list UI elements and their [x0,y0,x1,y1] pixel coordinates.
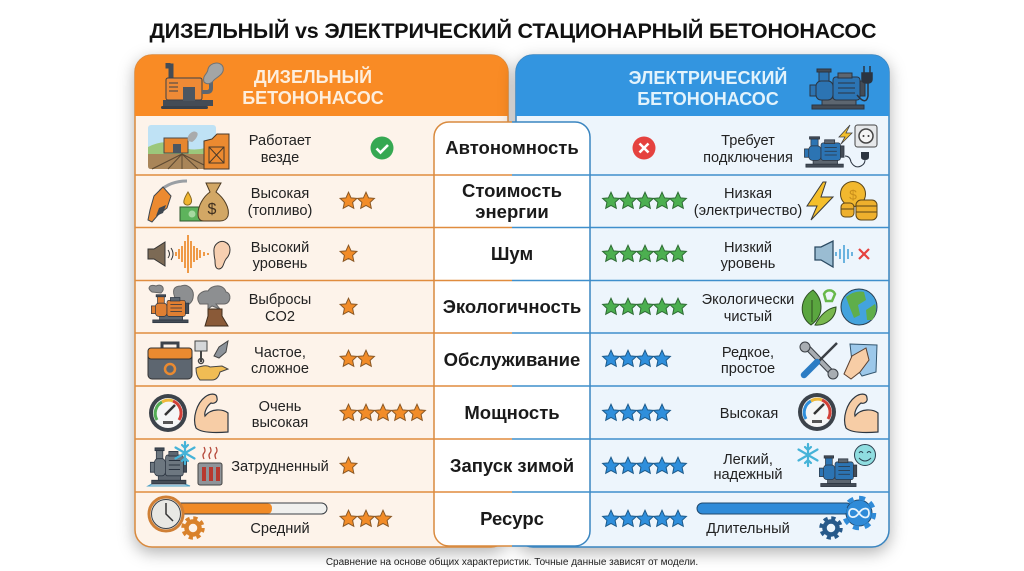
criterion: autonomy: Автономность [445,137,579,158]
diesel header bar [135,55,508,116]
row: ecology electric [603,289,877,325]
criterion: lifespan: Ресурс [480,508,544,529]
panel: electric pump [516,55,889,547]
icon: hand wiping with cloth [844,344,877,379]
icon: wrench and screwdriver [800,342,838,379]
text [694,186,802,219]
diesel header text: ДИЗЕЛЬНЫЙ [254,66,372,87]
icon: pump and socket [804,125,877,167]
footnote: Сравнение на основе общих характеристик. Точные данные зависят от модели. [326,556,698,568]
criterion: power: Мощность [464,402,560,423]
icon: gear [183,518,203,538]
row: noise electric [603,240,869,272]
text [249,292,311,325]
text: Высокая [251,186,309,202]
row: lifespan diesel [149,497,391,538]
icon: quiet speaker [815,241,869,267]
icon: red cross [632,136,656,160]
icon: coins [840,182,877,220]
text [252,399,308,431]
text: уровень [253,256,307,272]
row: power electric [603,393,878,433]
icon: green check [370,136,394,160]
title: ДИЗЕЛЬНЫЙ vs ЭЛЕКТРИЧЕСКИЙ СТАЦИОНАРНЫЙ БЕТОНОНАСОС [150,18,876,43]
rating: 3 stars [340,510,391,526]
electric header bar [516,55,889,116]
text: уровень [721,256,775,272]
text: (электричество) [694,203,802,219]
row: winter start electric [603,444,876,487]
row: noise diesel [148,235,357,273]
text: Очень [259,399,301,415]
icon: toolbox, piston, oil can [148,341,228,380]
icon: smiley [854,444,876,466]
icon: infinity gear [844,498,874,528]
rating: 5 green stars [603,298,686,314]
text: (топливо) [248,203,312,219]
icon: gauge [149,394,187,432]
rating: 5 blue stars [603,510,686,526]
rating: 2 stars [340,350,374,366]
row: power diesel [149,394,425,433]
text: Высокий [251,240,309,256]
text: Средний [250,521,310,537]
row: energy cost diesel [148,181,374,222]
text: Выбросы [249,292,311,308]
rating: 4 blue stars [603,350,670,366]
text: сложное [251,361,309,377]
criterion: ecology: Экологичность [443,296,581,317]
icon: fuel nozzle and money bag [148,181,228,222]
icon: clock [149,497,183,531]
text [251,345,309,377]
icon: fuel nozzle and money bag: $ [208,201,217,218]
icon: lightning bolt [807,182,833,220]
row: winter start diesel [148,442,357,486]
text: Низкая [724,186,772,202]
icon: pump [819,456,857,487]
row: autonomy diesel [148,125,394,169]
rating: 5 green stars [603,192,686,208]
icon: frozen pump, snowflake, heater [148,442,222,486]
text: простое [721,361,775,377]
icon: globe [841,289,877,325]
icon: coins: $ [849,186,857,202]
icon: electric pump with plug [810,66,872,109]
text: Затрудненный [231,459,329,475]
progress bar: long [697,503,852,514]
rating: 4 blue stars [603,404,670,420]
text: Легкий, [723,452,773,468]
row: ecology diesel [149,285,357,326]
row: maintenance diesel [148,341,374,380]
rating: 2 stars [340,192,374,208]
text [721,240,775,272]
text: CO2 [265,309,295,325]
diesel header text: БЕТОНОНАСОС [242,88,384,108]
text: Высокая [720,406,778,422]
icon: diesel pump with smoke [161,63,223,109]
text: Частое, [254,345,306,361]
text [249,133,312,166]
text: надежный [713,467,783,483]
panel: central criteria column [434,122,590,546]
icon: field scene and jerrycan [148,125,229,169]
icon: pump and stump with smoke [149,285,230,326]
text: Требует [721,133,775,149]
text: подключения [703,150,793,166]
progress bar: medium [165,503,327,514]
text: Редкое, [722,345,774,361]
rating: 1 star [340,245,357,261]
icon: speaker sound wave ear [148,235,230,273]
rating: 1 star [340,457,357,473]
electric header text [629,67,787,109]
icon: flexed arm [195,394,228,433]
electric header text: БЕТОНОНАСОС [637,89,779,109]
text: Экологически [702,292,794,308]
row: lifespan electric [603,498,874,538]
criterion: energy cost [462,180,562,222]
criterion: maintenance: Обслуживание [444,349,580,370]
text: везде [261,150,299,166]
text: Длительный [706,521,790,537]
icon: gauge [798,393,836,431]
rating: 5 green stars [603,245,686,261]
text [248,186,312,219]
rating: 1 star [340,298,357,314]
icon: small gear [821,518,841,538]
icon: flexed arm [845,394,878,433]
row: energy cost electric [603,182,877,220]
criterion: energy cost: Стоимость [462,180,562,201]
text [703,133,793,166]
diesel header text [242,66,384,108]
criterion: energy cost: энергии [475,201,549,222]
text [251,240,309,272]
text: Низкий [724,240,772,256]
row: autonomy electric [632,125,877,167]
rating: 5 blue stars [603,457,686,473]
icon: leaves and recycling [802,290,836,325]
electric header text: ЭЛЕКТРИЧЕСКИЙ [629,67,787,88]
text [721,345,775,377]
text: высокая [252,415,308,431]
text: чистый [724,309,772,325]
text [702,292,794,325]
rating: 5 stars [340,404,425,420]
icon: snowflake [798,444,818,466]
criterion: winter start: Запуск зимой [450,455,574,476]
text [713,452,783,483]
panel: diesel pump [135,55,508,547]
criterion: noise: Шум [491,243,533,264]
text: Работает [249,133,312,149]
row: maintenance electric [603,342,877,379]
